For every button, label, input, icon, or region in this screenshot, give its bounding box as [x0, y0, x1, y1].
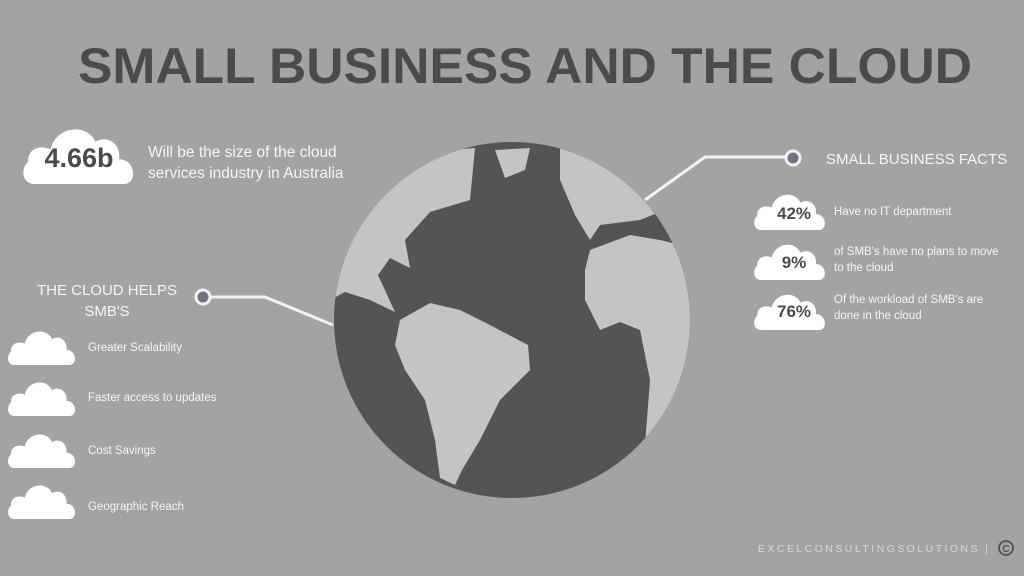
stat: 4.66b — [23, 129, 344, 184]
stat: 4.66b: 4.66b — [44, 143, 114, 173]
callout line: left — [196, 290, 333, 325]
stat: 4.66b: Will be the size of the cloud — [148, 144, 337, 161]
heading: the cloud helps SMB's — [37, 282, 177, 320]
facts list: Have no IT department — [834, 206, 952, 218]
title: SMALL BUSINESS AND THE CLOUD — [78, 38, 972, 94]
callout line: right — [645, 151, 800, 200]
heading: the cloud helps SMB's: SMB'S — [84, 303, 130, 320]
heading: the cloud helps SMB's: THE CLOUD HELPS — [37, 282, 177, 299]
facts list: done in the cloud — [834, 310, 922, 322]
facts list: 9% — [782, 253, 806, 272]
benefit list — [8, 332, 217, 519]
footer credit: C — [1002, 544, 1010, 555]
benefit list: Cost Savings — [88, 445, 156, 457]
globe — [330, 142, 700, 498]
benefit list: Greater Scalability — [88, 342, 182, 354]
benefit list: Geographic Reach — [88, 501, 184, 513]
facts list: Of the workload of SMB's are — [834, 294, 983, 306]
facts list: 42% — [777, 204, 811, 223]
facts list: 76% — [777, 302, 811, 321]
facts list: of SMB's have no plans to move — [834, 246, 999, 258]
footer credit: EXCELCONSULTINGSOLUTIONS | — [758, 543, 988, 555]
facts list: to the cloud — [834, 262, 893, 274]
stat: 4.66b: services industry in Australia — [148, 165, 344, 182]
heading: small business facts: SMALL BUSINESS FACTS — [826, 151, 1007, 168]
benefit list: Faster access to updates — [88, 392, 217, 404]
facts list — [754, 195, 999, 330]
